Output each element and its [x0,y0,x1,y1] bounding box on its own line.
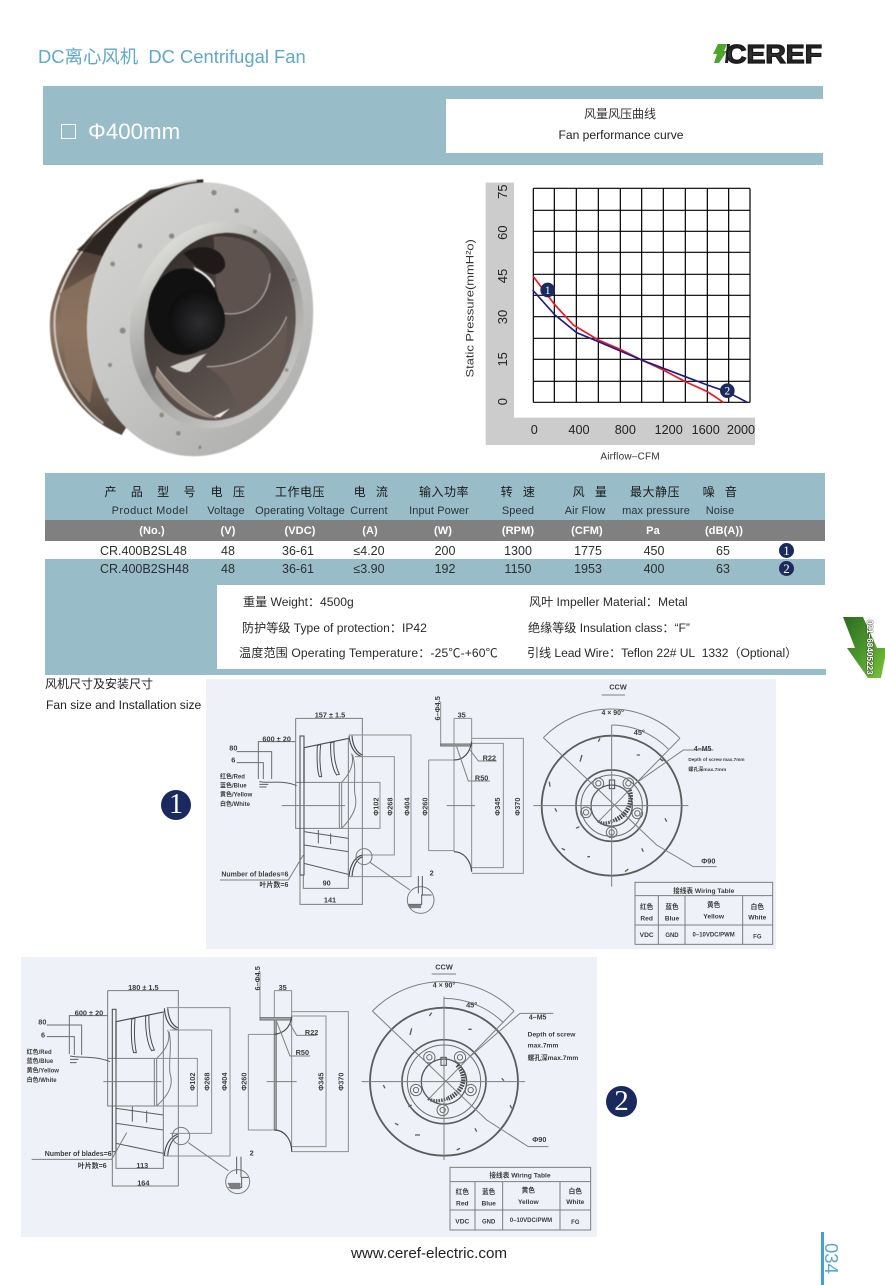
blades [213,236,271,314]
badge 1 [161,790,191,820]
drawing 2 side view labels: Φ370 [337,1073,346,1091]
drawing 2 side view labels: 蓝色/Blue [27,1057,54,1065]
drawing 1 side view labels: Φ345 [493,798,502,816]
drawing 2 side view labels: 白色/White [27,1076,57,1084]
drawing 1 front view labels: 蓝色 [665,902,679,911]
drawing 2 side view labels: 叶片数=6 [78,1161,107,1170]
drawing 2 side view labels: 600 ± 20 [75,1009,103,1018]
lead wire: 引线 Lead Wire：Teflon 22# UL 1332（Optional） [527,646,797,660]
page number bar [821,1232,824,1285]
drawing 1 front view labels: 黄色 [707,900,721,909]
table header english: Speed [502,505,534,517]
drawing 2 side view labels: 6 [41,1030,45,1039]
drawing 1 side view labels: 2 [430,869,434,878]
drawing 2 front view labels: 红色 [456,1187,469,1196]
drawing 2 front view labels: 蓝色 [482,1187,496,1196]
x axis numbers: 1600 [692,423,720,437]
x axis numbers: 2000 [727,423,755,437]
drawing 2 side view labels: 113 [136,1161,148,1170]
drawing 2 side view labels: Φ102 [188,1073,197,1091]
size section label [45,677,201,712]
table row 2: ≤3.90 [353,562,385,576]
y axis numbers: 45 [495,269,510,283]
drawing 1 side view labels: 90 [323,879,331,888]
drawing 2 front view labels [433,962,585,1226]
table row 1: 48 [221,544,235,558]
x axis numbers: 1200 [655,423,683,437]
y axis title: Static Pressure(mmH²o) [464,239,476,377]
table row 1: 1775 [574,544,602,558]
table header chinese: 输入功率 [419,485,469,499]
y axis numbers: 75 [495,184,510,199]
table header english: max pressure [622,505,690,517]
table units row: (VDC) [284,525,316,537]
drawing 1 side view [220,702,523,913]
drawing 1 side view labels: 157 ± 1.5 [315,711,345,720]
table header chinese: 转 速 [501,485,535,499]
drawing 1 front view labels: 螺孔深max.7mm [688,766,727,773]
table row 2: 36-61 [282,562,314,576]
table row 2: 1150 [505,562,531,576]
y axis numbers [495,184,510,405]
drawing 2 side view labels [27,966,346,1187]
chart axis background [486,183,755,445]
table header english: Noise [706,505,734,517]
drawing 2 front view [362,974,591,1230]
drawing 1 front view labels: VDC [640,932,654,939]
table header english: Current [350,505,388,517]
x axis numbers: 800 [615,423,636,437]
drawing 1 side view labels: 蓝色/Blue [220,781,247,789]
motor [148,268,220,355]
drawing 1 front view labels: Blue [665,915,680,922]
drawing 1 side view labels: 白色/White [220,800,251,808]
drawing 1 side view labels [220,696,522,904]
drawing 2 front view labels: GND [482,1219,496,1225]
row 1 badge [779,543,794,558]
drawing 2 front view labels: 螺孔深max.7mm [528,1053,578,1062]
drawing 2 front view labels: 45° [466,1000,477,1009]
drawing 2 side view labels: 80 [38,1018,46,1027]
table row 2: 48 [221,562,235,576]
table units row [45,520,825,541]
drawing 1 side view labels: Number of blades=6 [221,871,288,878]
back shell [50,179,203,435]
drawing 1 front view labels: 4 × 90° [601,709,624,717]
drawing 2 front view labels: CCW [435,962,453,971]
badge 1: 1 [169,789,183,820]
drawing 1 front view labels: GND [665,933,679,939]
drawing 1 front view labels: CCW [609,683,627,692]
parameters white box [217,585,826,669]
drawing 2 side view labels: 红色/Red [27,1048,52,1056]
curve marker 1 [540,283,555,297]
drawing 1 side view labels: 35 [458,710,466,719]
table row 2: 63 [716,562,730,576]
row 1 badge: 1 [783,543,790,558]
table row 2: 400 [644,562,664,576]
drawing 1 side view labels: R50 [475,773,488,782]
drawing 2 side view labels: Φ268 [202,1073,211,1091]
drawing 2 front view labels: Φ90 [532,1135,546,1144]
table row 1: 450 [644,544,664,558]
drawing 1 side view labels: Φ260 [421,798,430,816]
table row 1: ≤4.20 [353,544,385,558]
drawing 1 front view labels: Depth of screw max.7mm [688,757,744,762]
drawing 1 front view labels [601,683,767,940]
drawing 1 front view labels: White [748,915,767,922]
drawing 2 side view labels: 164 [137,1178,150,1187]
front ring [69,168,331,471]
curve marker 2: 2 [724,386,730,398]
table header chinese: 最大静压 [630,485,680,499]
drawing 2 front view labels: 白色 [569,1186,582,1195]
table units row: (A) [362,525,378,537]
curve 2 blue [533,290,747,402]
hole [127,219,313,435]
table header english: Product Model [112,505,188,517]
table units row: (No.) [139,525,165,537]
model checkbox [61,124,76,139]
drawing 2 side view labels: 6–Φ4.5 [253,966,262,991]
model heading: Φ400mm [88,119,180,144]
table header chinese: 电 流 [354,485,388,499]
drawing 2 side view labels: R50 [296,1048,309,1057]
table row 2: 1953 [574,562,602,576]
x axis title: Airflow–CFM [600,452,660,463]
drawing 1 side view labels: 黄色/Yellow [220,791,253,799]
drawing 1 front view labels: 4–M5 [694,746,712,753]
chart grid [533,188,750,402]
drawing 1 side view labels: 叶片数=6 [259,880,288,889]
table header chinese [104,485,737,499]
drawing 1 side view labels: 6 [231,756,235,765]
table header chinese: 噪 音 [703,485,737,499]
drawing 2 front view labels: Blue [481,1200,496,1207]
curve title box [446,99,823,153]
table header chinese: 产 品 型 号 [104,485,196,499]
drawing 1 front view labels: 0–10VDC/PWM [693,932,735,938]
drawing 2 side view labels: R22 [305,1028,318,1037]
drawing 1 front view labels: Yellow [703,913,725,920]
drawing 2 side view labels: Φ345 [317,1073,326,1091]
table units row: (dB(A)) [705,525,743,537]
side tab: phone: 021–68405223 [865,620,874,675]
table header english: Input Power [409,505,469,517]
page number [821,1232,842,1285]
table units row: (W) [434,525,452,537]
drawing 1 front view labels: 红色 [640,902,654,911]
curve 1 red [533,277,723,402]
table units row: Pa [646,525,660,537]
curve marker 1: 1 [545,285,551,297]
drawing 2 front view labels: Depth of screw [528,1032,576,1039]
impeller material: 风叶 Impeller Material：Metal [529,595,688,609]
row 2 badge: 2 [783,561,790,576]
table units row: (RPM) [502,525,534,537]
rim marks [105,190,295,449]
drawing 1 side view labels: 红色/Red [220,772,245,780]
drawing 2 front view labels: White [566,1199,585,1206]
table units row: (CFM) [571,525,603,537]
table row 2: CR.400B2SH48 [100,562,189,576]
drawing 2 front view labels: FG [571,1220,580,1226]
protection: 防护等级 Type of protection：IP42 [242,621,427,635]
y axis numbers: 30 [495,310,510,324]
table header english: Operating Voltage [255,505,345,517]
table header english: Voltage [207,505,245,517]
drawing 1 side view labels: Φ404 [402,797,411,816]
page number text: 034 [821,1243,842,1274]
drawing 1 front view labels: Φ90 [701,856,715,865]
drawing 1 side view labels: Φ370 [513,798,522,816]
title: DC离心风机 DC Centrifugal Fan [38,46,306,67]
drawing 1 side view labels: 141 [324,895,336,904]
drawing 1 front view labels: 接线表 Wiring Table [673,886,735,895]
drawing 1 side view labels: Φ268 [385,798,394,816]
drawing 2 front view labels: 接线表 Wiring Table [489,1170,551,1179]
website footer: www.ceref-electric.com [351,1245,507,1262]
table header english [112,505,734,517]
drawing 2 side view labels: Number of blades=6 [45,1151,112,1158]
drawing 2 front view labels: VDC [455,1218,470,1225]
badge 2: 2 [614,1085,629,1117]
drawing 2 side view labels: Φ404 [220,1072,229,1091]
table header chinese: 工作电压 [275,485,325,499]
table row 1: 36-61 [282,544,314,558]
header band [43,86,823,165]
drawing 2 front view labels: 4–M5 [529,1014,547,1021]
curve title chinese: 风量风压曲线 [584,107,656,121]
drawing 1 front view labels: 白色 [751,902,764,911]
table row 1: 200 [435,544,455,558]
table row 1: 65 [716,544,730,558]
table header chinese: 风 量 [573,485,607,499]
drawing 2 side view labels: 黄色/Yellow [27,1066,59,1074]
curve marker 2 [720,383,735,398]
drawing 2 front view labels: 4 × 90° [433,981,455,989]
drawing 1 side view labels: Φ102 [371,798,380,816]
insulation: 绝缘等级 Insulation class：“F” [528,621,690,635]
drawing 1 front view [533,695,773,944]
temperature: 温度范围 Operating Temperature：-25℃-+60℃ [239,646,498,660]
product photo: impeller [49,178,314,457]
drawing 2 front view labels: max.7mm [528,1042,558,1049]
drawing 1 front view labels: 45° [634,728,645,737]
side tab: phone [843,617,885,678]
drawing 2 front view labels: Red [456,1200,469,1207]
table header english: Air Flow [565,505,605,517]
curve title english: Fan performance curve [558,128,684,142]
drawing 2 front view labels: 0–10VDC/PWM [510,1218,552,1224]
badge 2 [606,1086,637,1117]
x axis numbers [531,423,755,437]
drawing 2 side view labels: 35 [279,983,287,992]
x axis numbers: 0 [531,423,538,437]
table row 1: CR.400B2SL48 [100,544,187,558]
chart: fan performance curve [464,182,755,463]
table header chinese: 电 压 [211,485,245,499]
drawing 2 side view labels: Φ260 [239,1073,248,1091]
table row 2: 192 [435,562,455,576]
drawing 1 front view labels: FG [753,934,762,940]
table units row: (V) [221,525,235,537]
drawing 1 side view labels: 6–Φ4.5 [433,696,442,721]
row 2 badge [779,561,794,576]
parameters panel [45,585,826,675]
table row 1: 1300 [504,544,532,558]
y axis numbers: 60 [495,225,510,240]
spec table [45,473,825,585]
drawing 1 [206,679,776,949]
drawing 1 side view labels: R22 [483,753,496,762]
drawing 2 [21,957,597,1237]
drawing 1 front view labels: Red [640,915,653,922]
drawing 1 side view labels: 80 [229,744,237,753]
drawing 2 front view labels: 黄色 [522,1186,535,1195]
table row 1 [45,541,825,559]
drawing 2 side view labels: 180 ± 1.5 [128,983,159,992]
drawing 1 side view labels: 600 ± 20 [262,735,291,744]
y axis numbers: 0 [495,398,510,405]
size label english: Fan size and Installation size [46,698,201,712]
size label chinese: 风机尺寸及安装尺寸 [45,677,153,691]
table row 2 [100,561,794,576]
weight: 重量 Weight：4500g [243,595,354,609]
drawing 2 side view [32,972,348,1194]
x axis numbers: 400 [568,423,590,437]
drawing 2 front view labels: Yellow [518,1199,540,1206]
drawing 2 side view labels: 2 [250,1149,254,1158]
y axis numbers: 15 [495,352,510,367]
